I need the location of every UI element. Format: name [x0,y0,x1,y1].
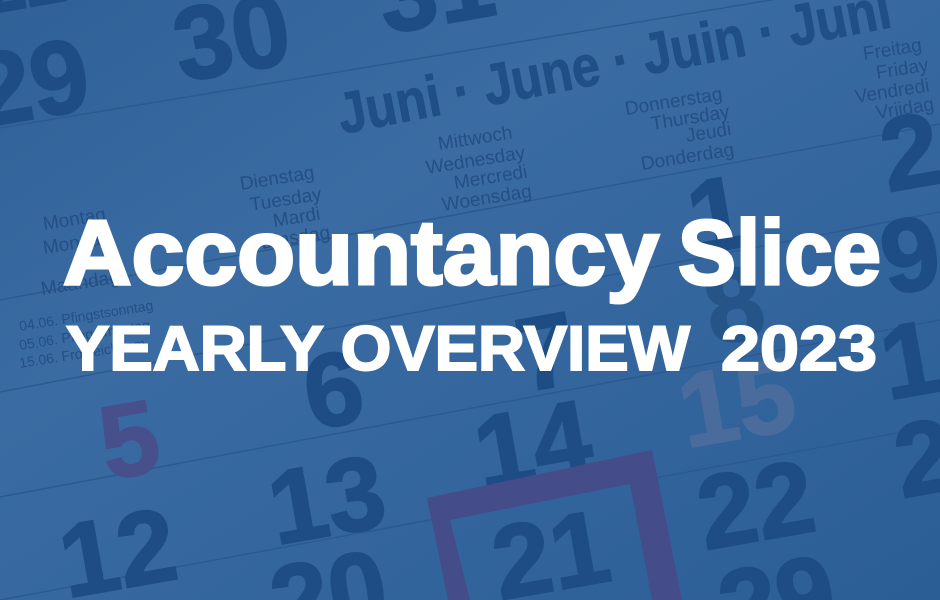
holiday notes [18,297,154,371]
weekday labels: Monday [41,228,112,259]
large date numbers: 14 [466,378,600,513]
weekday labels: Freitag [861,35,923,65]
large date numbers: 7 [508,290,585,415]
weekday labels: Mittwoch [436,122,514,155]
weekday labels: Maandag [39,267,121,300]
holiday notes: 15.06. Fronleichnam [18,335,147,371]
weekday labels: Mardi [271,204,322,232]
large date numbers: 15 [670,336,804,471]
weekday labels: Montag [41,204,107,235]
large date numbers: 1 [679,153,756,278]
title: Accountancy Slice: Slice [678,202,881,304]
weekday labels: Dinsdag [259,222,332,254]
weekday labels: Friday [874,55,930,84]
weekday labels: Thursday [649,102,732,135]
subtitle: Yearly Overview 2023: YEARLY OVERVIEW [66,314,691,384]
weekday labels: Vendredi [853,75,931,108]
weekday labels: Jeudi [684,119,733,147]
weekday labels: Donderdag [639,139,736,175]
large date numbers: 6 [295,328,372,453]
large date numbers: 22 [689,438,823,573]
large date numbers: 5 [91,378,168,503]
holiday notes: 05.06. Pfingstmontag [18,316,151,353]
weekday labels: Dienstag [238,162,316,195]
weekday labels: Tuesday [248,184,324,216]
holiday notes: 04.06. Pfingstsonntag [18,297,154,334]
subtitle: Yearly Overview 2023: 2023 [721,314,877,384]
highlighted date frame [427,450,682,600]
weekday labels: Vrijdag [874,94,936,124]
weekday labels: Wednesday [424,142,527,179]
weekday labels: Mercredi [452,162,529,194]
weekday labels: Woensdag [440,181,533,216]
title: Accountancy Slice: Accountancy [63,202,659,304]
large date numbers: 8 [696,243,773,368]
weekday labels [39,35,936,300]
large date numbers: 13 [260,433,394,568]
weekday labels: Donnerstag [623,84,724,120]
